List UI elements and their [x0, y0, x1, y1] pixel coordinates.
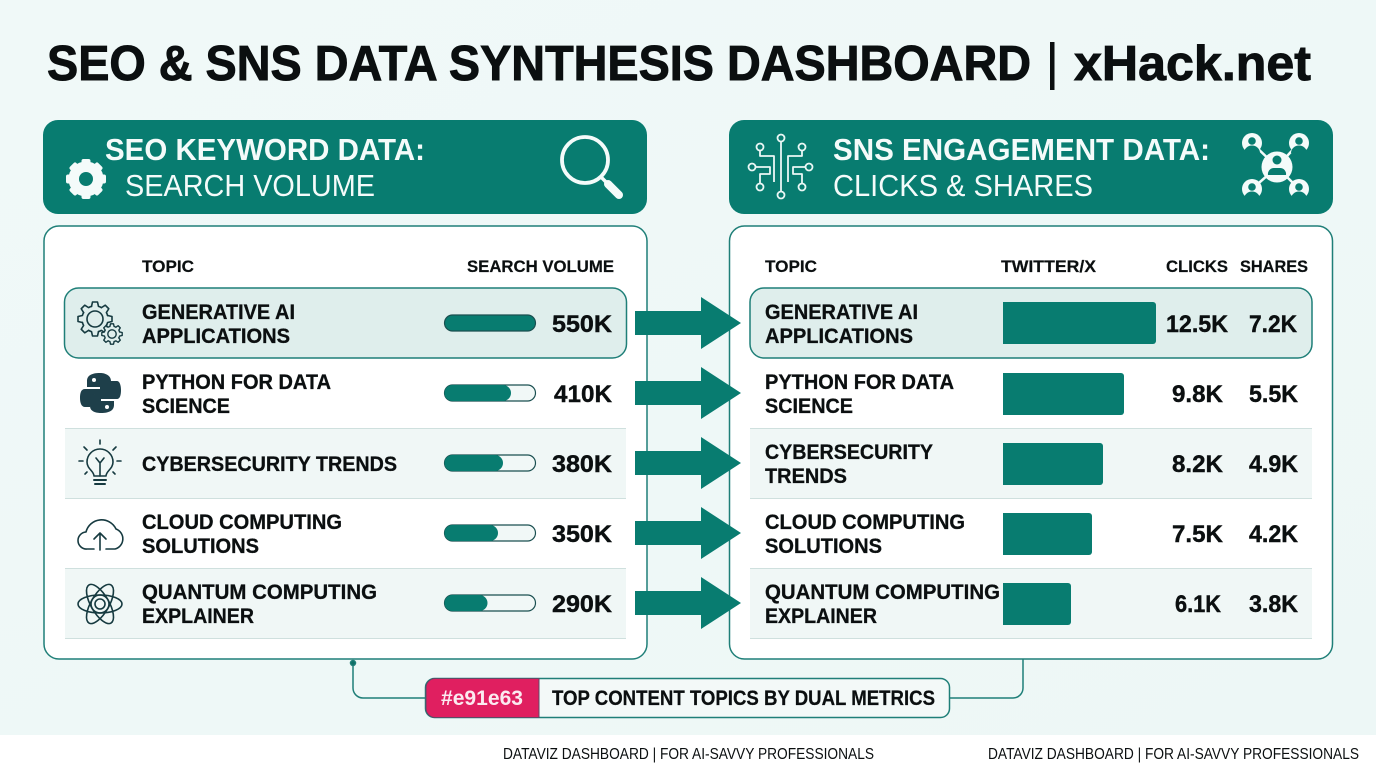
bar: 410K [444, 385, 536, 401]
row: cybersecurity: TRENDS [765, 464, 847, 488]
panel header: SNS engagement data [729, 120, 1333, 214]
row: python: 9.8K [1172, 381, 1224, 408]
row: generative AI: 7.2K [1249, 311, 1298, 338]
heading: SEO keyword data: SEO KEYWORD DATA: [105, 132, 425, 167]
panel: SNS table [730, 226, 1332, 659]
bar: 290K [444, 595, 536, 611]
row: generative AI: APPLICATIONS [142, 324, 290, 348]
subheading: search volume: SEARCH VOLUME [125, 168, 375, 203]
bar: 350K [444, 525, 536, 541]
row: generative AI [64, 288, 626, 358]
column heading: search volume: SEARCH VOLUME [467, 258, 614, 276]
row: cloud computing: SOLUTIONS [142, 534, 259, 558]
bar: twitter generative AI [1003, 302, 1156, 344]
connector: bottom right [950, 659, 1023, 698]
row: quantum computing: EXPLAINER [765, 604, 877, 628]
row: cybersecurity: 8.2K [1172, 451, 1224, 478]
column heading: topic: TOPIC [142, 258, 194, 276]
column heading: topic: TOPIC [765, 258, 817, 276]
panel header: SEO keyword data [43, 120, 647, 214]
row: cybersecurity: CYBERSECURITY [765, 440, 933, 464]
arrow: cybersecurity [635, 437, 741, 489]
subheading: clicks and shares: CLICKS & SHARES [833, 168, 1093, 203]
title: SEO & SNS DATA SYNTHESIS DASHBOARD [47, 37, 1031, 91]
bar: twitter quantum [1003, 583, 1071, 625]
row: quantum computing [65, 569, 626, 638]
icon: atom [78, 580, 122, 628]
panel: SEO table [44, 226, 647, 659]
icon: gears [78, 302, 122, 344]
row: cloud computing [65, 510, 626, 568]
arrow: quantum [635, 577, 741, 629]
legend pill [426, 678, 950, 718]
row: cloud computing: 350K [552, 521, 613, 548]
row: python: PYTHON FOR DATA [142, 370, 331, 394]
bar: twitter cybersecurity [1003, 443, 1103, 485]
row: quantum computing: QUANTUM COMPUTING [142, 580, 377, 604]
icon: gear [66, 159, 106, 199]
bar: 550K [444, 315, 536, 331]
row: cybersecurity: 4.9K [1249, 451, 1299, 478]
icon: cloud upload [78, 520, 123, 550]
row: quantum computing: QUANTUM COMPUTING [765, 580, 1000, 604]
arrow: cloud [635, 507, 741, 559]
row: quantum computing: 290K [552, 591, 613, 618]
row: python [65, 370, 626, 428]
row: python [750, 370, 1312, 428]
bar: twitter cloud [1003, 513, 1092, 555]
bar: twitter python [1003, 373, 1124, 415]
column heading: clicks: CLICKS [1166, 258, 1228, 276]
row: cloud computing: 4.2K [1249, 521, 1299, 548]
footer note: left: DATAVIZ DASHBOARD | FOR AI-SAVVY PROFESSIONALS [503, 746, 874, 763]
arrow: generative AI [635, 297, 741, 349]
row: generative AI: 12.5K [1166, 311, 1229, 338]
row: cybersecurity: 380K [552, 451, 613, 478]
row: generative AI: GENERATIVE AI [765, 300, 918, 324]
row: python: SCIENCE [142, 394, 230, 418]
heading: SNS engagement data: SNS ENGAGEMENT DATA: [833, 132, 1210, 167]
icon: python [80, 373, 121, 413]
row: quantum computing: EXPLAINER [142, 604, 254, 628]
row: cloud computing: CLOUD COMPUTING [142, 510, 342, 534]
row: cloud computing [750, 510, 1312, 568]
row: cybersecurity [750, 429, 1312, 498]
connector: bottom left [350, 660, 426, 698]
bar: 380K [444, 455, 536, 471]
row: python: SCIENCE [765, 394, 853, 418]
row: generative AI: GENERATIVE AI [142, 300, 295, 324]
column heading: twitter/x: TWITTER/X [1001, 258, 1096, 276]
title: xHack.net [1074, 37, 1311, 91]
icon: light bulb [79, 440, 121, 484]
row: generative AI [750, 288, 1312, 358]
row: cybersecurity: CYBERSECURITY TRENDS [142, 452, 397, 476]
row: cloud computing: CLOUD COMPUTING [765, 510, 965, 534]
row: cybersecurity [65, 429, 626, 498]
colour swatch [426, 678, 539, 718]
row: python: PYTHON FOR DATA [765, 370, 954, 394]
row: cloud computing: 7.5K [1172, 521, 1224, 548]
icon: circuit [748, 134, 812, 198]
row: generative AI: APPLICATIONS [765, 324, 913, 348]
row: quantum computing: 6.1K [1175, 591, 1222, 618]
row: quantum computing [750, 569, 1312, 638]
icon: magnifying glass [562, 137, 619, 195]
row: generative AI: 550K [552, 311, 613, 338]
row: cloud computing: SOLUTIONS [765, 534, 882, 558]
legend label: TOP CONTENT TOPICS BY DUAL METRICS [552, 687, 935, 710]
arrow: python [635, 367, 741, 419]
legend pill: #e91e63 [441, 687, 523, 710]
row: quantum computing: 3.8K [1249, 591, 1299, 618]
column heading: shares: SHARES [1240, 258, 1308, 276]
icon: people network [1242, 133, 1309, 199]
row: python: 5.5K [1249, 381, 1299, 408]
row: python: 410K [554, 381, 613, 408]
